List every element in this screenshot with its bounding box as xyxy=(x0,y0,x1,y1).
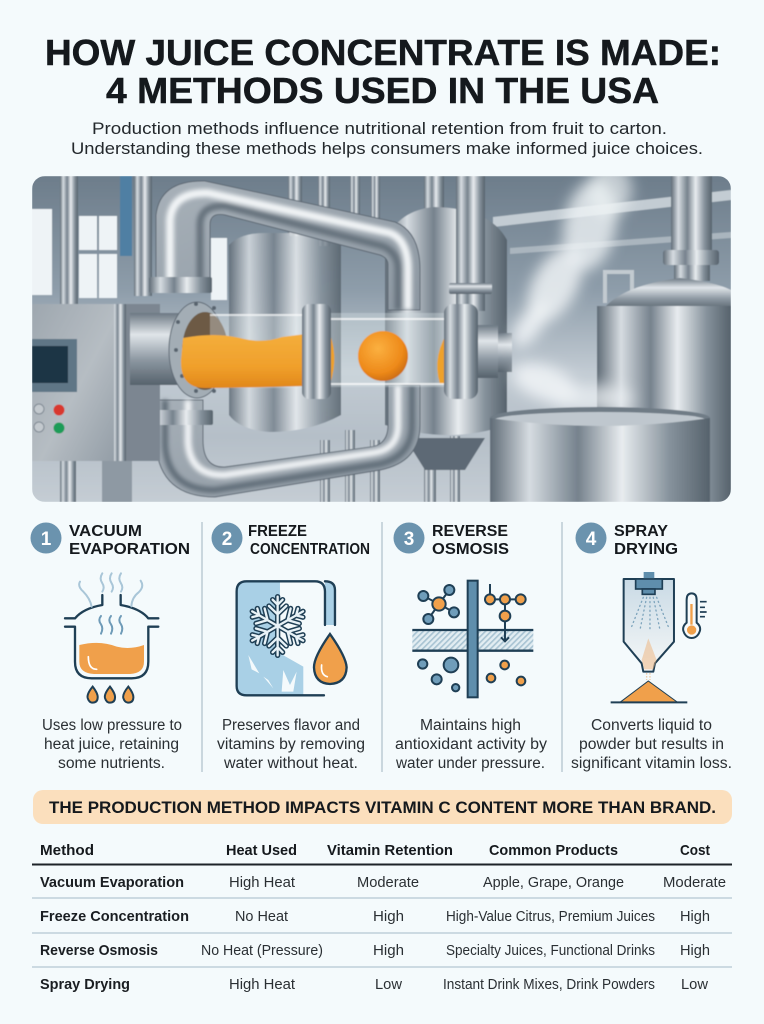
row: vacuum evaporation: Vacuum Evaporation xyxy=(40,874,184,891)
pipe clamps xyxy=(146,277,213,425)
title: HOW JUICE CONCENTRATE IS MADE: xyxy=(45,32,721,73)
row: freeze concentration: High xyxy=(373,908,404,925)
heading xyxy=(69,523,190,558)
panel: vacuum evaporation xyxy=(30,522,190,772)
description xyxy=(217,717,365,772)
description xyxy=(42,717,182,772)
collection vessel xyxy=(490,407,710,502)
heading: VACUUM xyxy=(69,523,142,540)
steam xyxy=(505,162,632,412)
flanges xyxy=(302,304,478,399)
table header: Vitamin Retention xyxy=(327,842,453,859)
right tank xyxy=(597,176,731,502)
dividers xyxy=(202,522,562,772)
lower pipe xyxy=(156,385,420,497)
flange: inlet xyxy=(169,302,228,398)
row: reverse osmosis: Reverse Osmosis xyxy=(40,942,158,959)
description: significant vitamin loss. xyxy=(571,755,732,772)
glass tube with juice xyxy=(181,313,451,388)
row: freeze concentration: High-Value Citrus, Premium Juices xyxy=(446,908,655,925)
row: vacuum evaporation: Moderate xyxy=(357,874,419,891)
subtitle: Understanding these methods helps consumers make informed juice choices. xyxy=(71,139,703,158)
row: vacuum evaporation: High Heat xyxy=(229,874,296,891)
table header: Common Products xyxy=(489,842,618,859)
heading: FREEZE xyxy=(248,523,307,540)
row: freeze concentration: No Heat xyxy=(235,908,289,925)
table header: Cost xyxy=(680,842,710,859)
subtitle xyxy=(71,119,703,158)
description xyxy=(395,717,547,772)
orange fruit xyxy=(358,331,408,381)
description: some nutrients. xyxy=(58,755,165,772)
row: reverse osmosis: High xyxy=(680,942,710,959)
icon: membrane and molecules xyxy=(412,581,533,697)
callout banner xyxy=(33,790,732,824)
step number 1 xyxy=(30,522,62,554)
background tanks xyxy=(229,233,341,432)
icon: spray dryer and thermometer xyxy=(611,572,707,702)
row: freeze concentration: Freeze Concentration xyxy=(40,908,189,925)
description: vitamins by removing xyxy=(217,736,365,753)
description: Maintains high xyxy=(420,717,521,734)
heading xyxy=(432,523,509,558)
row: spray drying: Instant Drink Mixes, Drink Powders xyxy=(443,976,655,993)
control screen xyxy=(32,339,77,392)
heading: CONCENTRATION xyxy=(250,541,370,558)
heading: OSMOSIS xyxy=(432,541,509,558)
icon: freeze container and drop xyxy=(237,581,347,695)
step number 3: 3 xyxy=(404,529,414,550)
row: freeze concentration: High xyxy=(680,908,710,925)
heading xyxy=(248,523,370,558)
heading: SPRAY xyxy=(614,523,668,540)
icon: evaporator pot xyxy=(65,573,158,703)
table header xyxy=(40,842,710,859)
callout banner: THE PRODUCTION METHOD IMPACTS VITAMIN C CONTENT MORE THAN BRAND. xyxy=(49,799,716,817)
row: freeze concentration xyxy=(40,908,710,925)
control box xyxy=(32,304,160,461)
nozzle xyxy=(478,325,512,378)
background pillars xyxy=(60,176,731,502)
description: antioxidant activity by xyxy=(395,736,547,753)
row: spray drying: Low xyxy=(681,976,708,993)
heading: REVERSE xyxy=(432,523,508,540)
heading xyxy=(614,523,678,558)
step number 2: 2 xyxy=(222,529,232,550)
hero image: juice processing equipment xyxy=(32,162,731,502)
subtitle: Production methods influence nutritional retention from fruit to carton. xyxy=(92,119,667,138)
row: spray drying xyxy=(40,976,708,993)
description: powder but results in xyxy=(579,736,724,753)
description xyxy=(571,717,732,772)
description: Converts liquid to xyxy=(591,717,712,734)
step number 4 xyxy=(576,522,606,554)
description: heat juice, retaining xyxy=(44,736,179,753)
row: reverse osmosis: No Heat (Pressure) xyxy=(201,942,323,959)
step number 3 xyxy=(394,522,424,554)
panel: spray drying xyxy=(571,522,732,772)
row: reverse osmosis: Specialty Juices, Functional Drinks xyxy=(446,942,655,959)
row: spray drying: Spray Drying xyxy=(40,976,130,993)
step number 1: 1 xyxy=(41,529,52,550)
row: vacuum evaporation xyxy=(40,874,726,891)
row: spray drying: Low xyxy=(375,976,402,993)
heading: DRYING xyxy=(614,541,678,558)
front vertical pipe xyxy=(449,176,492,311)
background windows xyxy=(32,209,227,300)
title: 4 METHODS USED IN THE USA xyxy=(106,70,659,111)
recirculation pipes xyxy=(156,181,420,497)
step number 4: 4 xyxy=(586,529,597,550)
description: water without heat. xyxy=(223,755,358,772)
upper pipe xyxy=(156,181,420,310)
row: vacuum evaporation: Apple, Grape, Orange xyxy=(483,874,624,891)
row: reverse osmosis: High xyxy=(373,942,404,959)
title xyxy=(45,32,721,111)
panel: freeze concentration xyxy=(212,522,370,772)
row: reverse osmosis xyxy=(40,942,710,959)
table header: Heat Used xyxy=(226,842,297,859)
row: spray drying: High Heat xyxy=(229,976,296,993)
control buttons xyxy=(34,404,64,434)
panel: reverse osmosis xyxy=(394,522,547,772)
description: Uses low pressure to xyxy=(42,717,182,734)
table header: Method xyxy=(40,842,94,859)
heading: EVAPORATION xyxy=(69,541,190,558)
step number 2 xyxy=(212,522,242,554)
row: vacuum evaporation: Moderate xyxy=(663,874,726,891)
description: water under pressure. xyxy=(395,755,545,772)
comparison table xyxy=(32,842,732,993)
description: Preserves flavor and xyxy=(222,717,360,734)
